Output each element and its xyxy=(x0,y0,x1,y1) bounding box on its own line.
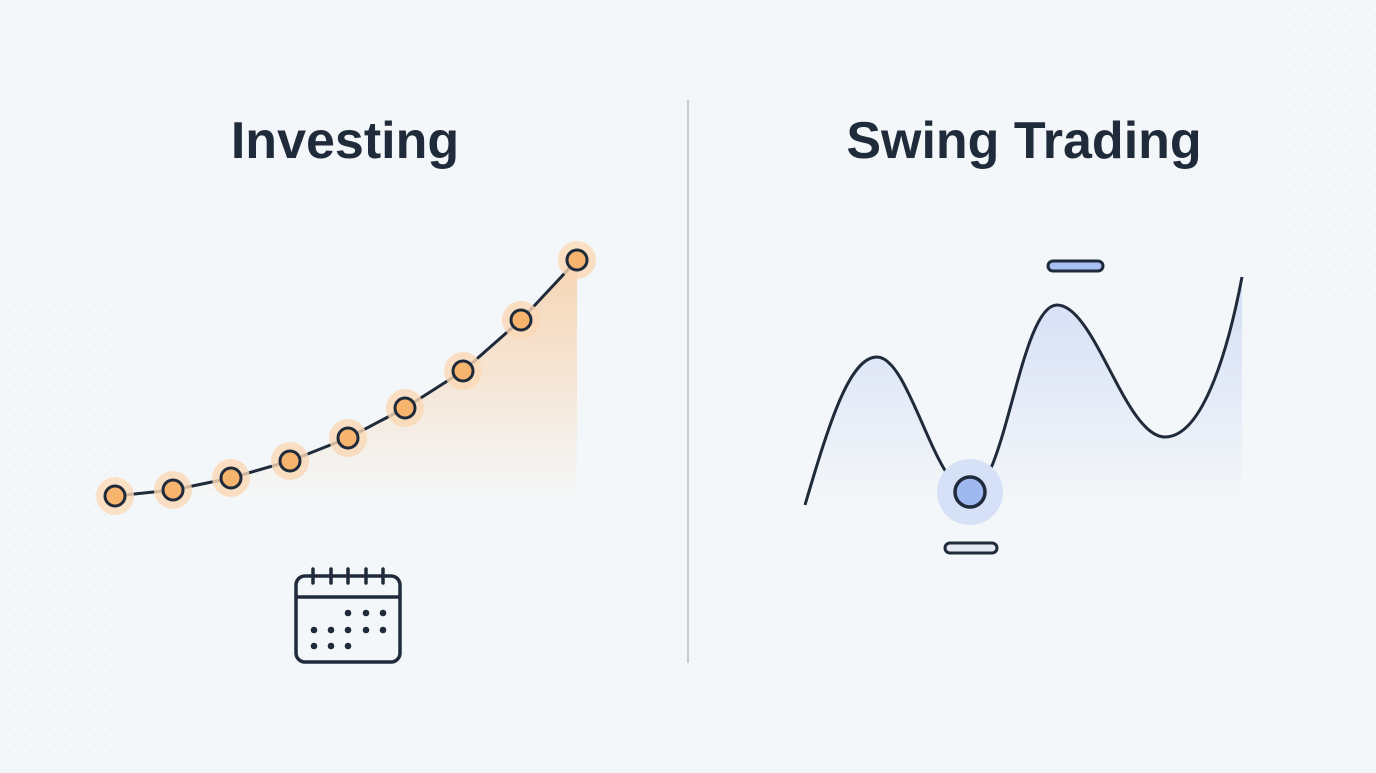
marker: top bar xyxy=(1048,261,1103,271)
title: Swing Trading: Swing Trading xyxy=(846,112,1202,170)
divider xyxy=(687,100,689,663)
title: Investing: Investing xyxy=(231,112,459,170)
chart: swing trading wave xyxy=(805,261,1242,553)
marker: buy low point xyxy=(937,459,1003,525)
chart: investing growth curve xyxy=(96,241,596,515)
marker: bottom bar xyxy=(945,543,997,553)
icon: calendar xyxy=(296,569,400,662)
